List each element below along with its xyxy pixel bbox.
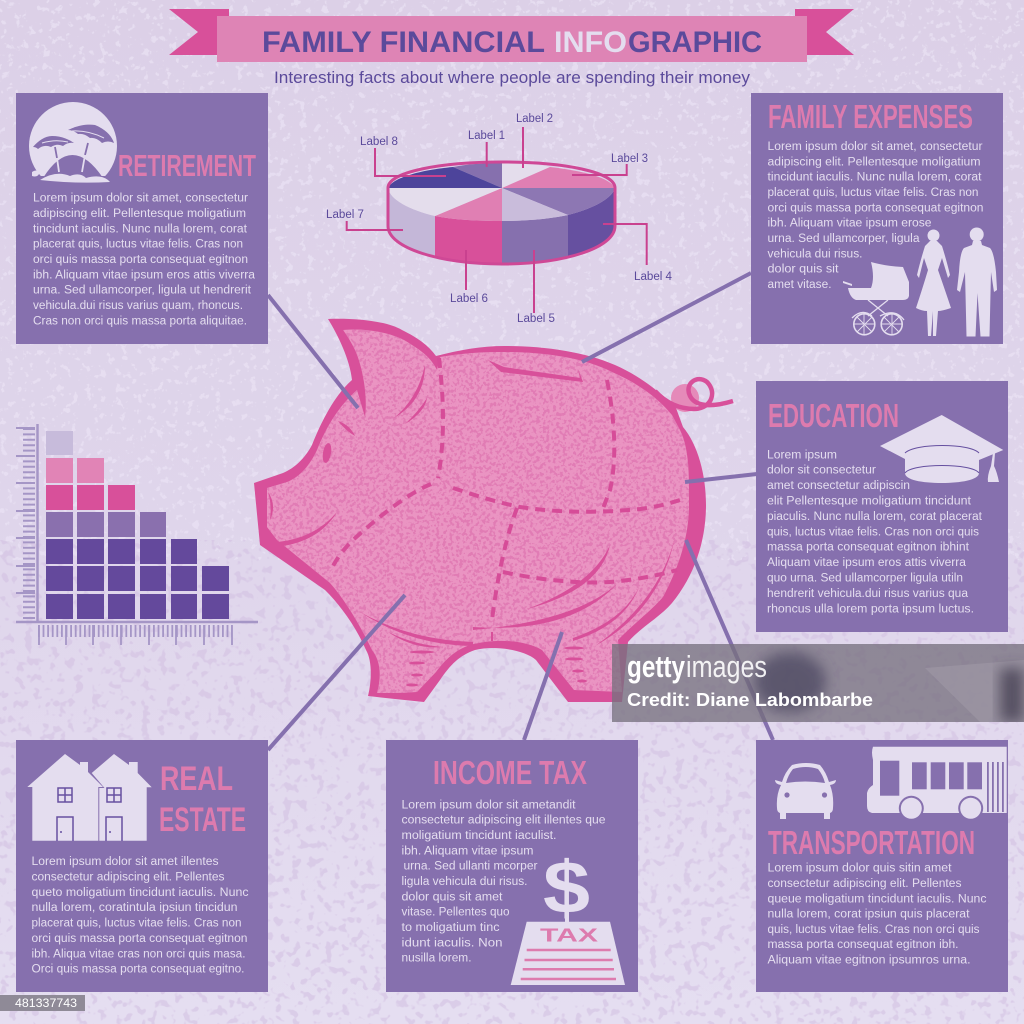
retirement body text: placerat quis, luctus vitae felis. Cras non: [33, 239, 243, 251]
transportation body text: [768, 863, 987, 966]
transportation background: [756, 740, 1008, 992]
education background: [756, 381, 1008, 632]
education body text: piaculis. Nunc nulla lorem, corat placerat: [767, 511, 983, 523]
family body text: Lorem ipsum dolor sit amet, consectetur: [768, 141, 983, 153]
icon: bus: [867, 747, 1007, 821]
banner ribbon left tail: [169, 9, 229, 55]
transportation body text: Aliquam vitae egitnon ipsumros urna.: [768, 954, 970, 966]
banner ribbon right tail: [795, 9, 854, 55]
family body text: dolor quis sit: [768, 264, 839, 276]
family body text: vehicula dui risus.: [768, 248, 862, 260]
pie top wedges: [388, 163, 615, 221]
real estate body text: Orci quis massa porta consequat egitno.: [32, 964, 244, 976]
real estate background: [16, 740, 268, 992]
retirement body text: urna. Sed ullamcorper, ligula ut hendrerit: [33, 285, 252, 297]
tax form: [511, 922, 625, 985]
retirement body text: [33, 193, 256, 327]
dollar sign: $: [543, 846, 590, 929]
icon: graduation cap: [880, 415, 1003, 483]
face and body creases: [268, 365, 675, 686]
chart axes and ticks: [16, 424, 258, 645]
education heading: EDUCATION: [768, 397, 899, 434]
family body text: amet vitase.: [768, 279, 832, 291]
pie labels: Label 3: [611, 153, 648, 165]
income tax body text: dolor quis sit amet: [402, 891, 503, 903]
income tax body text: to moligatium tinc: [402, 922, 500, 934]
education body text: amet consectetur adipiscin: [767, 480, 910, 492]
transportation body text: consectetur adipiscing elit. Pellentes: [768, 878, 962, 890]
real estate heading line two: ESTATE: [159, 801, 246, 839]
family body text: urna. Sed ullamcorper, ligula: [768, 233, 920, 245]
pie labels: [326, 113, 673, 325]
retirement body text: orci quis massa porta consequat egitnon: [33, 254, 248, 266]
icon: baby pram: [843, 262, 909, 335]
piggy bank illustration: [250, 315, 733, 710]
icon: beach umbrellas: [29, 102, 117, 190]
family body text: ibh. Aliquam vitae ipsum erose: [768, 218, 932, 230]
retirement body text: Lorem ipsum dolor sit amet, consectetur: [33, 193, 248, 205]
icon: dollar on tax form: [511, 846, 625, 985]
income tax body text: ibh. Aliquam vitae ipsum: [402, 845, 534, 857]
pie labels: Label 1: [468, 130, 505, 142]
education body text: Lorem ipsum: [767, 449, 837, 461]
banner band: [217, 16, 807, 62]
pie leader lines: [347, 127, 647, 313]
education body text: massa porta consequat egitnon ibhint: [767, 542, 970, 554]
icon: houses: [27, 754, 152, 841]
retirement body text: adipiscing elit. Pellentesque moligatium: [33, 208, 246, 220]
family body text: orci quis massa porta consequat egitnon: [768, 202, 984, 214]
title: GRAPHIC: [628, 26, 762, 59]
transportation body text: nulla lorem, corat ipsiun quis placerat: [768, 908, 970, 920]
title: FAMILY FINANCIAL: [262, 26, 545, 59]
real estate heading: REAL: [160, 760, 233, 798]
retirement body text: tincidunt iaculis. Nunc nulla lorem, corat: [33, 223, 248, 235]
panel: real estate: [16, 740, 268, 992]
education body text: elit Pellentesque moligatium tincidunt: [767, 496, 972, 508]
pig body fill: [267, 330, 689, 693]
image id badge: [0, 995, 85, 1011]
panel: retirement: [16, 93, 268, 344]
title: INFO: [554, 26, 627, 59]
education body text: Aliquam vitae ipsum eros attis viverra: [767, 557, 967, 569]
tax label: TAX: [540, 926, 598, 946]
pie labels: Label 6: [450, 293, 488, 305]
panel: income tax: [386, 740, 638, 992]
income tax body text: [402, 799, 606, 965]
pie labels: Label 8: [360, 136, 398, 148]
watermark shadows: [754, 652, 1024, 722]
retirement heading: RETIREMENT: [118, 148, 256, 183]
real estate body text: orci quis massa porta consequat egitnon: [32, 933, 248, 945]
income tax body text: Lorem ipsum dolor sit ametandit: [402, 799, 576, 811]
education body text: quis, luctus vitae felis. Cras non orci quis: [767, 526, 979, 538]
pie labels: Label 5: [517, 313, 555, 325]
watermark logo: images: [686, 649, 767, 684]
retirement body text: vehicula.dui risus varius quam, rhoncus.: [33, 300, 243, 312]
panel: family expenses: [751, 93, 1003, 344]
pig outline: [254, 319, 706, 702]
family body text: adipiscing elit. Pellentesque moligatium: [768, 156, 980, 168]
image id badge: 481337743: [15, 998, 77, 1010]
icon: woman: [916, 230, 951, 336]
income tax body text: idunt iaculis. Non: [402, 937, 502, 949]
family body text: placerat quis, luctus vitae felis. Cras non: [768, 187, 978, 199]
income tax body text: consectetur adipiscing elit illentes que: [402, 815, 606, 827]
income tax body text: nusilla lorem.: [402, 953, 472, 965]
income tax heading: INCOME TAX: [433, 754, 587, 791]
pie labels: Label 7: [326, 209, 364, 221]
watermark credit: Credit: Diane Labombarbe: [627, 690, 873, 710]
family body text: tincidunt iaculis. Nunc nulla lorem, corat: [768, 172, 982, 184]
education body text: quo urna. Sed ullamcorper ligula utiln: [767, 572, 963, 584]
family body text: [768, 141, 984, 291]
chart bars: [46, 431, 229, 619]
bar chart: [16, 424, 258, 645]
real estate body text: consectetur adipiscing elit. Pellentes: [32, 871, 225, 883]
income tax body text: moligatium tincidunt iaculist.: [402, 830, 556, 842]
watermark band: [612, 644, 1024, 722]
title banner: [169, 9, 854, 62]
education body text: dolor sit consectetur: [767, 465, 876, 477]
transportation body text: Lorem ipsum dolor quis sitin amet: [768, 863, 952, 875]
real estate body text: Lorem ipsum dolor sit amet illentes: [32, 856, 219, 868]
income tax body text: urna. Sed ullanti mcorper: [404, 861, 538, 873]
education body text: [767, 449, 983, 615]
real estate body text: queto moligatium tincidunt iaculis. Nunc: [32, 887, 249, 899]
real estate body text: placerat quis, luctus vitae felis. Cras non: [32, 918, 241, 930]
transportation body text: queue moligatium tincidunt iaculis. Nunc: [768, 893, 987, 905]
cut lines: [332, 358, 680, 620]
money slot: [488, 360, 583, 382]
panel: transportation: [756, 740, 1008, 992]
family background: [751, 93, 1003, 344]
real estate body text: nulla lorem, coratintula ipsiun tincidun: [32, 902, 238, 914]
income tax body text: ligula vehicula dui risus.: [402, 876, 528, 888]
pie labels: Label 2: [516, 113, 553, 125]
pie side faces: [388, 188, 615, 264]
income tax background: [386, 740, 638, 992]
retirement body text: Cras non orci quis massa porta aliquitae.: [33, 315, 247, 327]
icon: man: [957, 228, 997, 336]
income tax body text: vitase. Pellentes quo: [402, 907, 510, 919]
real estate body text: ibh. Aliqua vitae cras non orci quis masa.: [32, 948, 246, 960]
panel: education: [756, 381, 1008, 632]
icon: car: [775, 763, 836, 819]
subtitle: Interesting facts about where people are spending their money: [274, 69, 751, 87]
pie outline: [388, 162, 615, 264]
real estate body text: [32, 856, 249, 976]
education body text: rhoncus ulla lorem porta ipsum luctus.: [767, 603, 974, 615]
retirement body text: ibh. Aliquam vitae ipsum eros attis viverra: [33, 269, 256, 281]
pig tail: [655, 379, 733, 412]
pie labels: Label 4: [634, 271, 673, 283]
transportation body text: massa porta consequat egitnon ibh.: [768, 939, 958, 951]
watermark logo: getty: [627, 649, 686, 684]
retirement background: [16, 93, 268, 344]
pie chart: [326, 113, 673, 325]
transportation body text: quis, luctus vitae felis. Cras non orci quis: [768, 924, 980, 936]
connector lines from panels to pig: [268, 273, 773, 750]
education body text: hendrerit vehicula.dui risus varius qua: [767, 588, 969, 600]
